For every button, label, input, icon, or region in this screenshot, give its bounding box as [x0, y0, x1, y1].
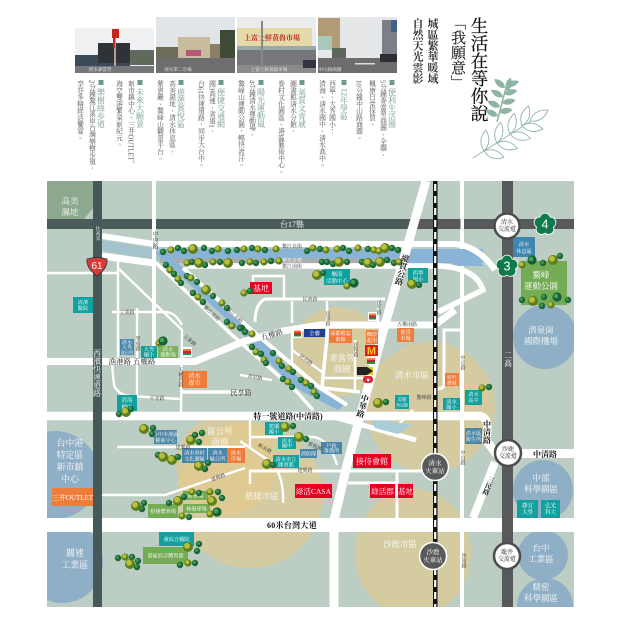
box: evening market — [397, 328, 414, 342]
box: Qingshui high: 清水 — [468, 390, 479, 398]
photo: Zhongshan Road shopping district — [318, 17, 397, 73]
interchange: Qingshui: 清水 — [501, 218, 513, 226]
icon: outlined leaf — [473, 105, 550, 161]
interchange: Longjing — [494, 543, 520, 569]
box: fire brigade: 消防隊 — [301, 450, 316, 458]
box: evening market: 市場 — [400, 334, 411, 342]
box: Qingshui market: 市場 — [231, 454, 242, 462]
road names: 西濱快速道路 — [92, 349, 102, 398]
box: Jianguo elementary: 建國 — [269, 422, 279, 430]
box: health center — [465, 428, 482, 444]
road names: 立業路 — [182, 333, 198, 348]
text column: tree walkway — [76, 79, 106, 172]
interchange: Shalu — [495, 440, 521, 466]
label: precision science park: 科學園區 — [524, 593, 558, 603]
box: art center — [153, 430, 178, 444]
photo: Qingshui second market — [156, 17, 235, 73]
icon: route 61 shield — [87, 258, 107, 276]
text column: tree walkway: 樂樹綠步道 — [96, 87, 106, 129]
box: Dashiu police station — [120, 339, 134, 355]
road names: 中正路 — [460, 354, 465, 371]
icon: red heart store logo — [363, 376, 373, 384]
box: cultural park — [182, 448, 207, 463]
station: Shalu: 沙鹿 — [426, 547, 440, 556]
box: Hungkuang University: 科大 — [545, 508, 556, 516]
box: banquet hall: 會館 — [335, 335, 346, 343]
box: Qingbin hospital — [73, 297, 93, 313]
box: Tungs hospital — [159, 532, 194, 546]
box: Quanlian — [304, 329, 325, 338]
label: precision science park: 精密 — [532, 582, 550, 592]
text column: culture — [276, 79, 306, 175]
road names: 五權路 — [260, 326, 284, 342]
box: cultural park: 文化園區 — [184, 454, 205, 462]
riverside roads — [102, 236, 495, 410]
text column: sport: 4分鐘清水運動場、 — [248, 80, 256, 138]
railway — [433, 181, 438, 607]
label: science park: 中部 — [532, 473, 550, 483]
photo: Qingshui second market: 清水第二市場 — [164, 66, 192, 73]
box: Qingshui elementary — [443, 398, 460, 411]
text column: leisure: 紫雲巖、鰲峰山觀景平台。 — [156, 79, 164, 162]
road names: 60米台灣大道 — [267, 520, 317, 530]
box: Fengnan activity center: 楓南 — [331, 270, 343, 278]
text column: schools: 12年學區 — [340, 88, 348, 121]
icon: McDonald's — [365, 345, 378, 358]
label: McDonald's district: 商圈 — [333, 364, 351, 374]
label: Shalu urban: 沙鹿市區 — [383, 539, 417, 549]
box: reception hall: 接待會館 — [356, 456, 388, 466]
road names: 中華路 — [355, 392, 370, 420]
park: Aofeng sports park: 鰲峰 — [532, 270, 550, 280]
box: Jianguo elementary: 國小 — [269, 428, 280, 436]
label: district office area: 區公所 — [207, 426, 233, 436]
box: softball field — [183, 504, 210, 513]
icon: convenience store — [367, 357, 375, 365]
box: Hungkuang University — [541, 500, 560, 518]
icon: route 4 shield — [534, 214, 556, 234]
box: rest area: 休息區 — [516, 247, 532, 255]
science and industrial park circles — [47, 305, 574, 607]
box: Dashiu police station: 派出所 — [121, 349, 134, 356]
box: household office — [321, 442, 342, 454]
photo: wholesale market building: 上富士鮮黃魯市場 — [251, 66, 288, 73]
box: Lvhuo Jun — [370, 484, 395, 498]
box: evening market: 黃昏 — [400, 328, 411, 336]
label: Taichung port area: 中心 — [61, 473, 80, 484]
box: Fengkang supermarket — [366, 330, 378, 344]
box: Meide kindergarten: 美德 — [398, 396, 407, 403]
photo: wholesale market building — [237, 17, 316, 73]
station: Qingshui — [422, 454, 448, 480]
box: Qinghai junior high: 清海 — [121, 396, 133, 404]
station: Shalu: 火車站 — [423, 555, 443, 564]
road names: 建興路 — [210, 472, 226, 483]
box: Providence University: 大學 — [522, 508, 533, 516]
label: Qingshui urban: 清水市區 — [395, 370, 429, 380]
interchange: Shalu: 沙鹿 — [502, 445, 514, 453]
road names: 五權西路 — [178, 367, 183, 388]
box: Qingshui market — [227, 448, 245, 463]
road names: 二高 — [504, 351, 512, 368]
road names: 鰲江南路 — [202, 304, 221, 323]
photo: McDonald's street — [75, 28, 154, 73]
box: Qingshui junior high — [278, 436, 296, 450]
text column: sport: 鰲峰山運動公園，暢快流汗。 — [236, 79, 245, 168]
road names: 民育路 — [302, 296, 318, 303]
box: reception hall — [353, 454, 391, 468]
box: fire brigade — [300, 449, 317, 458]
box: Dashiu elementary: 大秀 — [144, 345, 155, 353]
box: Dashiu elementary: 國小 — [144, 350, 155, 358]
label: Guanlian industrial — [61, 547, 89, 570]
road names: 民享路 — [230, 388, 252, 397]
box: district office: 區公所 — [210, 454, 226, 462]
box: Dashiu police station: 大秀 — [122, 343, 133, 351]
text column: leisure: 高美濕地、清水休息區、 — [168, 79, 176, 155]
box: Lvhuo Jun: 綠活郡 — [371, 486, 394, 496]
box: harbor sports complex: 港區綜合體育館 — [147, 552, 184, 560]
box: shooting range — [183, 491, 208, 500]
interchange: Qingshui: 交流道 — [498, 225, 516, 233]
highway: Taiwan 17 — [47, 219, 574, 229]
box: Qinghai junior high — [117, 395, 137, 411]
district circles: Qingshui — [292, 307, 495, 472]
road names: 中山路 — [460, 449, 465, 466]
text column: schools: 西寧、大秀國小： — [328, 80, 336, 134]
box: Lvhuo Casa — [295, 484, 332, 498]
label: district office area — [207, 426, 233, 447]
road names: 鰲峰路 — [416, 394, 432, 401]
road names: 鰲江北路 — [225, 306, 244, 325]
box: banquet hall — [329, 329, 352, 343]
text column: transport — [196, 79, 226, 168]
box: Tungs hospital: 童綜合醫院 — [164, 535, 190, 543]
box: times cinema — [445, 373, 459, 386]
road names — [92, 225, 557, 569]
text column: transport: 便捷交通網 — [216, 87, 226, 129]
station: Qingshui: 清水 — [428, 458, 442, 467]
icon: red heart store logo: ♥ — [366, 378, 370, 384]
box: rest area: 清水 — [519, 240, 530, 248]
icon: route 4 shield: 4 — [542, 218, 549, 232]
road names: 平等路 — [149, 395, 165, 402]
box: Xining elementary: 國小 — [412, 276, 424, 284]
box: district office: 清水 — [212, 448, 223, 456]
label: Guanlian industrial: 關連 — [66, 547, 84, 558]
highway: Taiwan 17: 台17縣 — [280, 219, 305, 229]
road: Zongguan and Zhonghua — [334, 181, 426, 607]
road names: 鰲江北街 — [282, 243, 302, 250]
title: 生活在等你說 — [469, 17, 489, 122]
box: Meide kindergarten: 幼兒園 — [396, 402, 408, 408]
road names: 中清路 — [482, 419, 492, 445]
label: science park: 科學園區 — [524, 484, 558, 494]
box: Lvhuo Casa: 綠活CASA — [296, 486, 332, 496]
box: night market: 夜市 — [188, 379, 201, 387]
text column: convenience: 便利生活圈 — [388, 87, 396, 129]
label: McDonald's district: 麥當勞 — [329, 353, 355, 363]
road names: 民和路 — [352, 341, 358, 358]
box: Xining elementary — [408, 268, 428, 284]
text column: culture: 氣質文青感 — [296, 87, 306, 129]
box: Outlet — [52, 488, 94, 506]
road names: 樂光步道 — [282, 257, 302, 264]
box: Providence University — [517, 500, 538, 518]
box: main site: 基地 — [253, 283, 269, 293]
road names: 建興路 — [297, 467, 313, 474]
road names: 新永路 — [256, 442, 273, 455]
box: Qingshui market: 清水 — [231, 448, 242, 456]
label: Guanlian industrial: 工業區 — [61, 559, 89, 570]
text column: schools — [318, 79, 348, 168]
box: Wuqi gymnasium: 梧棲體育場 — [150, 507, 177, 515]
label: science park — [524, 473, 558, 494]
road names: 雲程路 — [307, 440, 323, 453]
box: Qingshui elementary: 清水 — [446, 398, 457, 406]
box: Qinghai junior high: 國中 — [121, 403, 133, 411]
box: art center: 藝術中心 — [155, 436, 177, 444]
box: site right: 基地 — [398, 486, 413, 496]
road names: 民生路 — [376, 299, 381, 316]
text column: transport: 台61快速道路，同步大台中。 — [196, 79, 205, 168]
station: Shalu — [420, 542, 446, 570]
wetland area — [47, 181, 93, 219]
district circles: Wuqi and Shalu — [176, 415, 471, 617]
icon: route 61 shield: 61 — [91, 261, 103, 272]
text column: future vision: 新市鎮中心、三井OUTLET、 — [126, 79, 135, 168]
label: Taichung port area: 台中港 — [56, 437, 84, 448]
icon: 7-Eleven north — [368, 312, 377, 321]
box: Qingshui high — [465, 390, 482, 405]
label: Taichung industrial — [528, 543, 554, 564]
box: cultural park: 清水眷村 — [184, 448, 206, 456]
box: Qingshui stadium: 運動場 — [160, 350, 177, 358]
trees — [115, 243, 571, 570]
road names: 沙田路 — [460, 552, 466, 569]
text column: convenience: 10分鐘中山路商圈。 — [354, 80, 363, 141]
road names: 鰲江南街 — [282, 263, 302, 270]
highway: West Coast expressway 61 — [93, 181, 102, 607]
box: Fengkang supermarket: 楓康 — [367, 330, 377, 338]
text column: convenience — [354, 79, 396, 158]
box: Fengnan activity center: 活動中心 — [326, 277, 348, 285]
road names: 學府路 — [134, 335, 140, 352]
photo: wholesale market building: 上富士鮮黃魯市場 — [244, 33, 300, 42]
road names: 五權南路 — [397, 321, 417, 328]
road names: 三民路 — [480, 475, 495, 497]
box: household office: 戶政 — [326, 442, 337, 450]
box: times cinema: 時代 — [447, 374, 457, 381]
text column: sport — [236, 79, 266, 168]
box: Wuqi gymnasium — [148, 504, 178, 518]
box: household office: 事務所 — [324, 446, 340, 454]
photo: Zhongshan Road shopping district: 中山路商圈 — [319, 66, 342, 73]
road names: 縱貫公路 — [392, 252, 411, 288]
road names: 青草路 — [247, 373, 263, 382]
box: health center: 衛生所 — [466, 435, 482, 443]
label: Taichung port area — [56, 437, 84, 484]
road names: 建興路 — [175, 444, 191, 451]
text column: culture: 圖書館清水分館、 — [288, 79, 297, 134]
text column: schools: 清海、清水國中、清水高中。 — [318, 79, 326, 168]
interchange: Qingshui — [494, 214, 520, 238]
box: Dashiu police station: 清水 — [122, 338, 133, 346]
icon: McDonald's: M — [367, 346, 376, 358]
panel: location map — [11, 181, 577, 620]
road names: 民享路 — [324, 310, 330, 327]
wetland area: 濕地 — [61, 207, 79, 217]
road names: 漁港路 五權路 — [109, 356, 156, 366]
box: Xining elementary: 西寧 — [412, 269, 424, 277]
text column: culture: 眷村文化園區、港區藝術中心。 — [276, 79, 285, 175]
label: precision science park — [524, 582, 558, 603]
box: Quanlian: 全聯 — [309, 330, 320, 338]
box: softball field: 棒壘球場 — [186, 504, 208, 512]
park: Aofeng sports park — [521, 261, 567, 305]
box: times cinema: 戲城 — [447, 380, 457, 386]
text column: convenience: 5分鐘麥當勞商圈、全聯、 — [378, 80, 387, 158]
text column: leisure: 遊憩賞悅區 — [176, 87, 186, 129]
icon: filled leaf — [484, 77, 520, 122]
box: harbor sports complex — [143, 547, 188, 564]
box: Qingshui stadium: 清水 — [163, 345, 174, 353]
label: district office area: 商圈 — [211, 437, 229, 447]
road names: 中央路 — [151, 230, 158, 250]
box: Qingshui junior high: 清水 — [282, 436, 293, 444]
box: site right — [398, 484, 413, 498]
icon: 7-Eleven central — [293, 329, 302, 338]
label: Taichung industrial: 工業區 — [528, 554, 554, 564]
label: Wuqi urban: 梧棲市區 — [245, 491, 279, 501]
tagline line two: 自然天光雲影 — [411, 17, 424, 85]
text column: future vision: 海空雙港繁榮新紀元。 — [114, 79, 123, 148]
text column: tree walkway: 2分鐘鰲江溪岸台灣樂樹步道， — [88, 80, 96, 172]
park: Aofeng sports park: 運動公園 — [524, 281, 558, 291]
icon: route 3 shield: 3 — [504, 260, 511, 274]
box: Meide kindergarten — [395, 395, 409, 409]
box: district office — [208, 448, 227, 463]
box: night market: 清水 — [188, 372, 201, 380]
thin local roads — [47, 181, 462, 607]
label: airport: 清泉崗 — [528, 325, 554, 335]
road names: 民治路 — [298, 353, 314, 367]
text column: future vision — [114, 79, 144, 168]
label: airport — [524, 325, 558, 346]
box: Jianguo elementary — [265, 422, 283, 436]
box: Hungkuang University: 弘光 — [545, 502, 556, 510]
label: McDonald's district — [329, 353, 355, 374]
main roads — [47, 310, 574, 525]
text column: convenience: 楓康日常採買。 — [368, 79, 376, 128]
label: Taichung industrial: 台中 — [532, 543, 550, 553]
road: Zhongyang — [152, 181, 156, 358]
box: Fengnan activity center — [324, 269, 350, 285]
label: Taichung port area: 新市鎮 — [56, 461, 84, 472]
box: library — [273, 455, 299, 468]
label: airport: 國際機場 — [524, 336, 558, 346]
box: rest area — [513, 237, 535, 257]
tagline line one: 城區繁華暖域 — [426, 17, 438, 85]
road names: 立業路 — [119, 309, 135, 316]
icon: black and yellow store logo — [357, 367, 373, 375]
box: Qingbin hospital: 醫院 — [78, 304, 89, 312]
subtitle quote: 「我願意」 — [449, 15, 466, 90]
text column: sport: 陽光運動風 — [256, 87, 266, 129]
text column: leisure — [156, 79, 186, 162]
text column: tree walkway: 享芬多精綠活饗宴。 — [76, 79, 84, 141]
highway: Freeway 3 — [502, 181, 513, 607]
box: Qingshui stadium — [158, 346, 178, 358]
interchange: Longjing: 龍井 — [501, 548, 513, 556]
box: Qingbin hospital: 清濱 — [78, 298, 89, 306]
box: Qingshui elementary: 國小 — [446, 403, 457, 411]
interchange: Shalu: 交流道 — [499, 452, 517, 460]
wetland area: 高美 — [61, 196, 79, 206]
interchange: Longjing: 交流道 — [498, 555, 516, 563]
label: Taichung port area: 特定區 — [56, 449, 84, 460]
box: library: 清水市立 — [276, 455, 296, 463]
box: Providence University: 靜宜 — [522, 502, 533, 510]
road names: 特一號道路(中清路) — [253, 411, 323, 421]
text column: transport: 國3高速、省道1、 — [208, 79, 216, 134]
box: health center: 清水區 — [466, 429, 481, 437]
box: Dashiu elementary — [141, 346, 157, 358]
box: banquet hall: 成都殿宴 — [330, 329, 351, 337]
box: night market — [182, 371, 207, 388]
road names: 往高美 — [94, 225, 100, 242]
box: shooting range: 射擊場 — [188, 492, 204, 500]
river — [102, 240, 484, 434]
photo: McDonald's street: 清水麥當勞 — [89, 66, 112, 73]
box: Fengkang supermarket: 超市 — [367, 336, 377, 344]
box: art center: 台中市港區 — [153, 430, 178, 438]
road names: 中清路 — [533, 449, 557, 459]
text column: future vision: 未來大願景 — [134, 87, 144, 129]
icon: 7-Eleven west — [182, 347, 192, 357]
box: Qingshui high: 高中 — [468, 396, 479, 404]
icon: route 3 shield — [496, 256, 518, 276]
road overlay: x462 — [460, 219, 464, 229]
box: main site — [250, 282, 272, 294]
box: library: 圖書館 — [278, 460, 295, 468]
box: Qingshui junior high: 國中 — [282, 442, 292, 450]
station: Qingshui: 火車站 — [425, 466, 445, 475]
box: Outlet: 三井OUTLET — [52, 493, 94, 502]
